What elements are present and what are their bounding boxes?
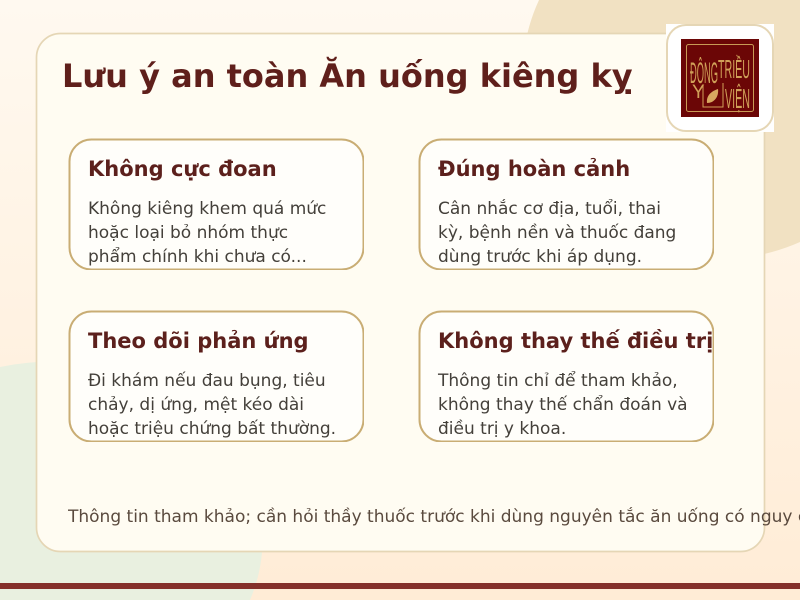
card: Không cực đoan: phẩm chính khi chưa có... [88, 247, 307, 267]
title: Lưu ý an toàn Ăn uống kiêng kỵ [62, 57, 633, 95]
logo mark: Y [692, 82, 705, 103]
card: Theo dõi phản ứng: hoặc triệu chứng bất thường. [88, 419, 336, 439]
card: Theo dõi phản ứng [68, 310, 364, 442]
logo tile [666, 24, 774, 132]
card: Đúng hoàn cảnh: Đúng hoàn cảnh [438, 157, 630, 181]
card: Đúng hoàn cảnh: kỳ, bệnh nền và thuốc đang [438, 223, 676, 243]
card: Không cực đoan: hoặc loại bỏ nhóm thực [88, 223, 288, 243]
card: Không thay thế điều trị: điều trị y khoa. [438, 419, 566, 439]
card: Đúng hoàn cảnh: Cân nhắc cơ địa, tuổi, thai [438, 199, 661, 219]
bottom bar [0, 583, 800, 589]
card: Đúng hoàn cảnh [418, 138, 714, 270]
card: Không thay thế điều trị: Không thay thế điều trị [438, 329, 713, 353]
card: Không thay thế điều trị [418, 310, 714, 442]
logo frame [666, 24, 774, 132]
card: Theo dõi phản ứng: Đi khám nếu đau bụng, tiêu [88, 371, 326, 391]
card: Theo dõi phản ứng: Theo dõi phản ứng [88, 329, 309, 353]
card: Theo dõi phản ứng: chảy, dị ứng, mệt kéo dài [88, 395, 304, 415]
card: Không cực đoan [68, 138, 364, 270]
card: Đúng hoàn cảnh: dùng trước khi áp dụng. [438, 247, 642, 267]
card: Không thay thế điều trị: Thông tin chỉ để tham khảo, [438, 371, 678, 391]
card: Không thay thế điều trị: không thay thế chẩn đoán và [438, 395, 688, 415]
card: Không cực đoan: Không kiêng khem quá mức [88, 199, 326, 219]
logo mark [681, 39, 759, 117]
card: Không cực đoan: Không cực đoan [88, 157, 277, 181]
